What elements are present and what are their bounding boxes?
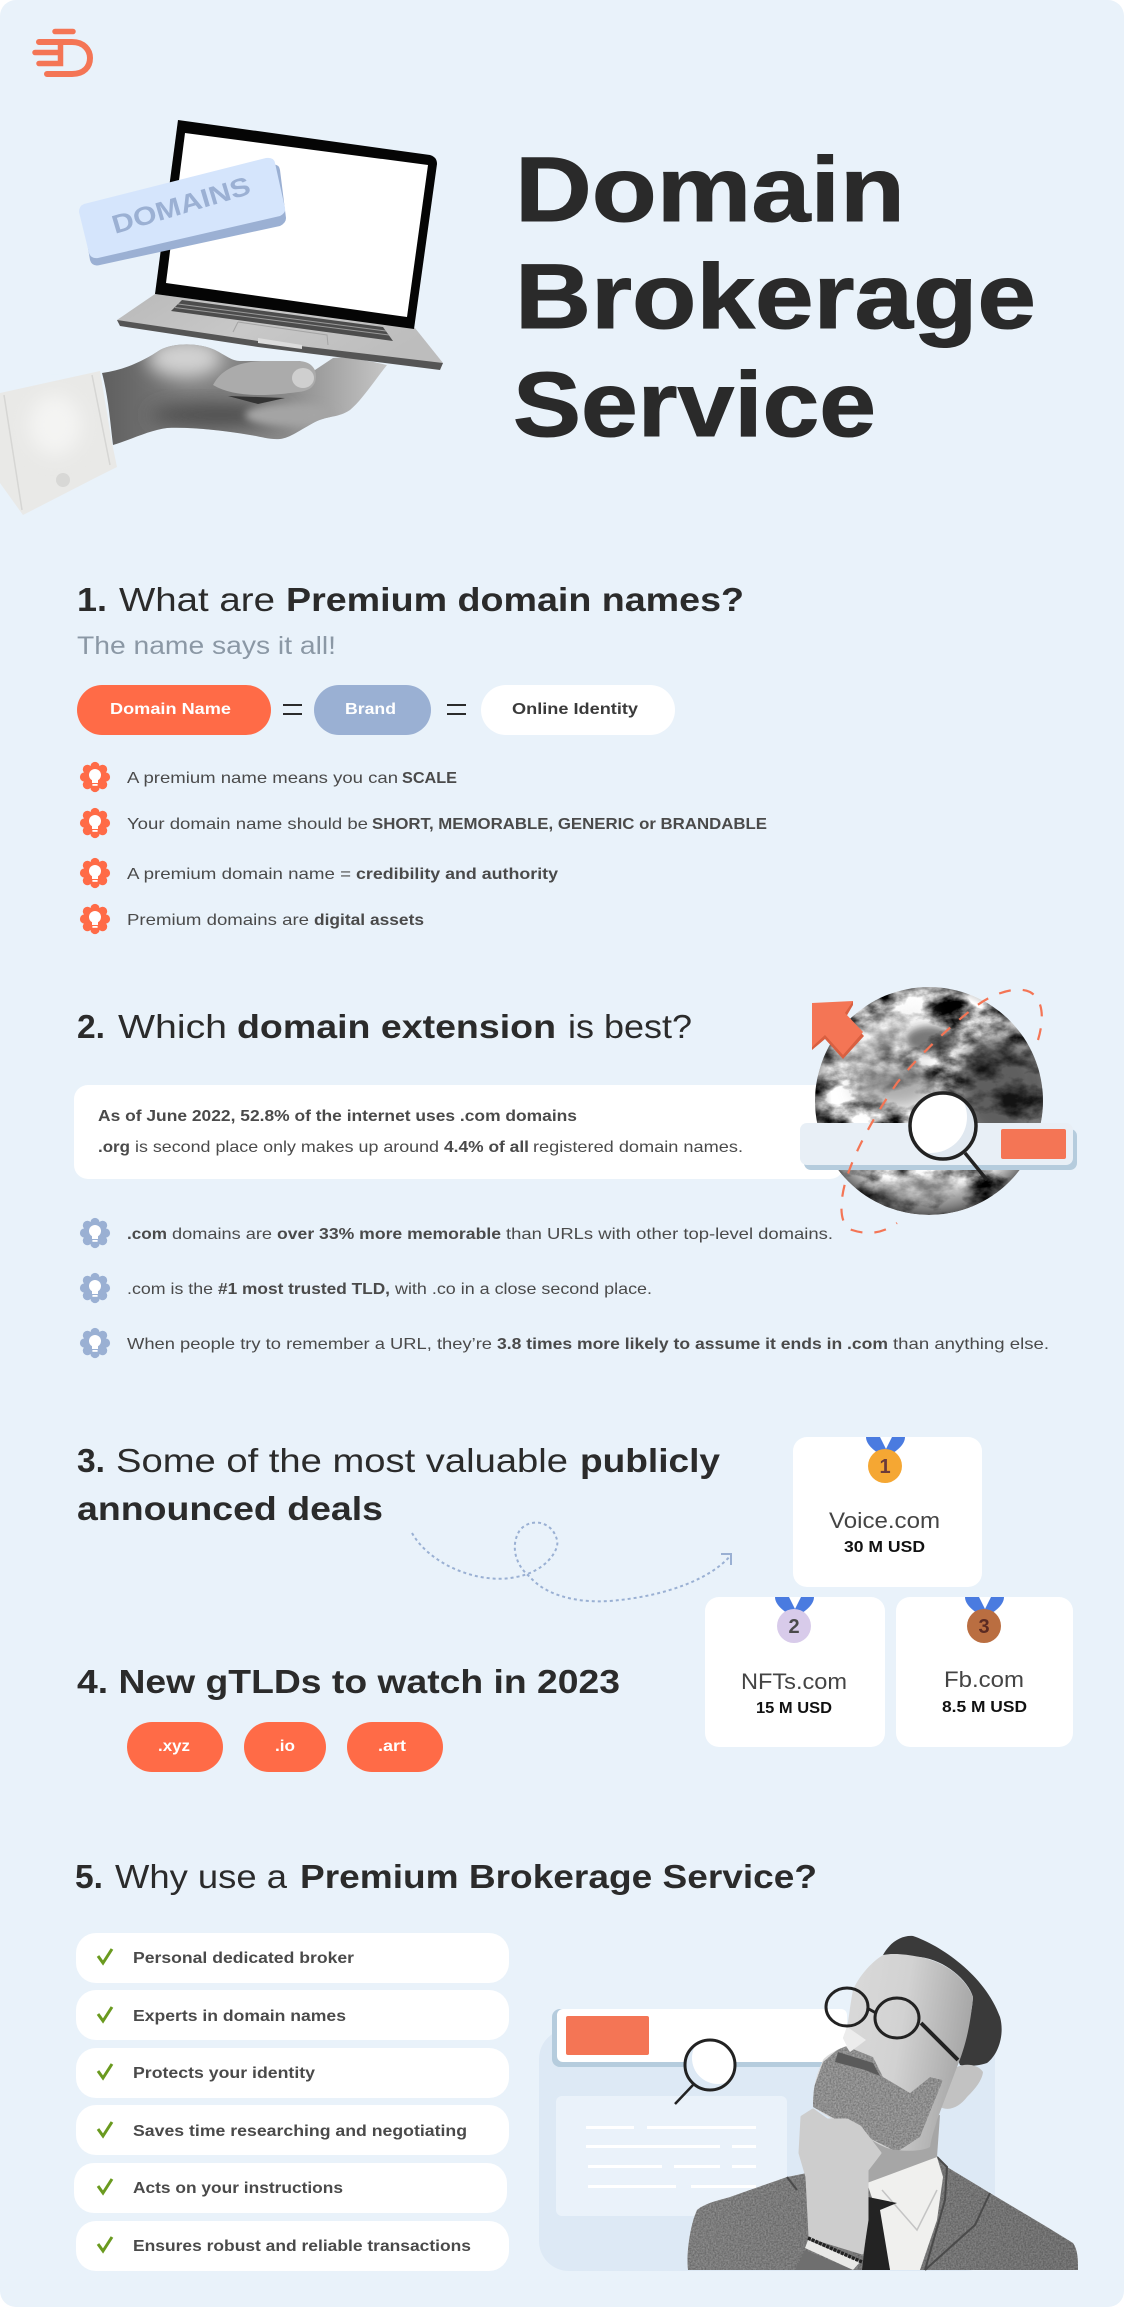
search bar bbox=[552, 2009, 842, 2067]
bullet: trusted: .com is the bbox=[127, 1281, 213, 1298]
heading 3: 3. bbox=[77, 1442, 105, 1479]
bracelet bbox=[808, 2238, 862, 2262]
bullet: scale bbox=[80, 762, 457, 792]
pill: brand bbox=[314, 685, 431, 735]
deal card: fb.com: 8.5 M USD bbox=[942, 1699, 1027, 1716]
pill: online identity bbox=[481, 685, 675, 735]
globe bbox=[815, 987, 1045, 1215]
thumb bbox=[213, 361, 316, 395]
dotted arrow bbox=[412, 1523, 731, 1601]
heading 2: is best? bbox=[568, 1008, 692, 1045]
silver medal: 2 bbox=[788, 1616, 800, 1638]
bullet: trusted: with .co in a close second place. bbox=[394, 1281, 652, 1298]
trackpad bbox=[233, 322, 328, 345]
heading 2: domain extension bbox=[237, 1008, 556, 1045]
row: transactions: Ensures robust and reliable transactions bbox=[133, 2238, 471, 2255]
key label: DOMAINS bbox=[108, 170, 254, 240]
pill: io: .io bbox=[275, 1738, 295, 1755]
statistics card: registered domain names. bbox=[533, 1139, 743, 1156]
heading 5: 5. bbox=[75, 1858, 103, 1895]
row: instructions bbox=[74, 2163, 507, 2213]
bullet: memorable: domains are bbox=[172, 1226, 272, 1243]
title: Domain bbox=[515, 139, 905, 241]
section 4: new gTLDs bbox=[77, 1663, 620, 1772]
heading 2 bbox=[77, 1008, 692, 1045]
pill: io bbox=[244, 1722, 326, 1772]
magnifier bbox=[908, 1091, 988, 1181]
jacket bbox=[687, 2157, 1078, 2270]
bullet: digital assets bbox=[80, 904, 424, 934]
statistics card: As of June 2022, 52.8% of the internet uses .com domains bbox=[98, 1108, 577, 1125]
bullet: credibility bbox=[80, 858, 558, 888]
bullet: trusted: #1 most trusted TLD, bbox=[218, 1281, 390, 1298]
bullet: scale: SCALE bbox=[402, 770, 457, 787]
heading 3 bbox=[77, 1442, 721, 1527]
magnifier bbox=[674, 2038, 736, 2105]
statistics card bbox=[74, 1085, 844, 1179]
section 3: valuable deals bbox=[77, 1437, 1073, 1747]
heading 5: Why use a bbox=[115, 1858, 288, 1895]
subheading: The name says it all! bbox=[77, 632, 336, 660]
row: personal broker: Personal dedicated broker bbox=[133, 1950, 354, 1967]
row: transactions bbox=[76, 2221, 509, 2271]
bullet: memorable: over 33% more memorable bbox=[277, 1226, 501, 1243]
man bbox=[687, 1936, 1078, 2270]
keyboard bbox=[171, 300, 393, 341]
pill: xyz bbox=[127, 1722, 223, 1772]
silver medal bbox=[775, 1597, 814, 1643]
bullet: short memorable: Your domain name should be bbox=[127, 816, 368, 833]
search bar bbox=[804, 1129, 1077, 1170]
heading 1: Premium domain names? bbox=[286, 581, 744, 618]
beard bbox=[813, 2024, 943, 2152]
row: saves time: Saves time researching and negotiating bbox=[133, 2123, 467, 2140]
bullet: scale: A premium name means you can bbox=[127, 770, 398, 787]
bullet: digital assets: digital assets bbox=[314, 912, 424, 929]
statistics card: is second place only makes up around bbox=[135, 1139, 439, 1156]
bullet: memorable: than URLs with other top-level domains. bbox=[506, 1226, 833, 1243]
gold medal: 1 bbox=[879, 1456, 891, 1478]
illustration: thinking man with search bbox=[539, 1936, 1078, 2271]
deal card: fb.com bbox=[896, 1597, 1073, 1747]
ear bbox=[940, 2065, 983, 2109]
heading 3: Some of the most valuable bbox=[116, 1442, 568, 1479]
bullet: credibility: A premium domain name = bbox=[127, 866, 351, 883]
bullet: trusted bbox=[80, 1273, 652, 1303]
deal card: fb.com: Fb.com bbox=[944, 1667, 1024, 1692]
hair bbox=[883, 1936, 1002, 2066]
deal card: voice.com: 30 M USD bbox=[844, 1539, 925, 1556]
section 1: premium domain names bbox=[77, 581, 767, 934]
statistics card: .org bbox=[98, 1139, 130, 1156]
bullet: 3.8 times: 3.8 times more likely to assume it ends in .com bbox=[497, 1336, 888, 1353]
statistics card: 4.4% of all bbox=[444, 1139, 529, 1156]
deal card: voice.com: Voice.com bbox=[829, 1508, 940, 1533]
heading 3: announced deals bbox=[77, 1490, 383, 1527]
bullet: 3.8 times: than anything else. bbox=[893, 1336, 1049, 1353]
pill: domain name: Domain Name bbox=[110, 701, 231, 718]
shirt bbox=[867, 2157, 943, 2270]
row: experts: Experts in domain names bbox=[133, 2008, 346, 2025]
bullet: 3.8 times bbox=[80, 1328, 1049, 1358]
deal card: nfts.com bbox=[705, 1597, 885, 1747]
bullet: memorable: .com bbox=[127, 1226, 167, 1243]
heading 3: publicly bbox=[580, 1442, 721, 1479]
bullet: credibility: credibility and authority bbox=[356, 866, 558, 883]
bullet: short memorable: SHORT, MEMORABLE, GENERIC or BRANDABLE bbox=[372, 816, 767, 833]
heading 5: Premium Brokerage Service? bbox=[300, 1858, 817, 1895]
section 2: domain extension bbox=[74, 987, 1077, 1358]
pill: brand: Brand bbox=[345, 701, 396, 718]
title: Brokerage bbox=[515, 246, 1036, 348]
shirt sleeve bbox=[0, 371, 117, 515]
deal card: voice.com bbox=[793, 1437, 982, 1587]
heading 1: What are bbox=[119, 581, 275, 618]
row: instructions: Acts on your instructions bbox=[133, 2180, 343, 2197]
gold medal bbox=[866, 1437, 905, 1483]
glasses bbox=[826, 1988, 958, 2060]
heading 2: 2. bbox=[77, 1008, 105, 1045]
pill: online identity: Online Identity bbox=[512, 701, 638, 718]
shirt cuff bbox=[805, 2240, 860, 2270]
hand bbox=[102, 338, 387, 445]
laptop base bbox=[117, 294, 443, 370]
row: personal broker bbox=[76, 1933, 509, 1983]
bullet: memorable bbox=[80, 1218, 833, 1248]
bullet: short memorable bbox=[80, 808, 767, 838]
pill: art: .art bbox=[378, 1738, 407, 1755]
pill: art bbox=[347, 1722, 443, 1772]
row: experts bbox=[76, 1990, 509, 2040]
heading 1: 1. bbox=[77, 581, 107, 618]
orange arrow bbox=[812, 1001, 864, 1059]
heading 1 bbox=[77, 581, 744, 618]
heading 2: Which bbox=[118, 1008, 227, 1045]
heading 4: 4. New gTLDs to watch in 2023 bbox=[77, 1663, 620, 1700]
sleeve bbox=[795, 2250, 853, 2270]
equation pills bbox=[77, 685, 675, 735]
neck bbox=[867, 2115, 940, 2185]
laptop screen frame bbox=[155, 120, 437, 329]
document panel bbox=[556, 2096, 787, 2216]
bronze medal: 3 bbox=[978, 1616, 990, 1638]
laptop screen bbox=[166, 133, 428, 317]
logo bbox=[35, 32, 90, 74]
dashed orbit bbox=[841, 990, 1042, 1233]
pill: xyz: .xyz bbox=[158, 1738, 190, 1755]
hand on chin bbox=[800, 2110, 880, 2253]
title: Service bbox=[513, 354, 876, 456]
illustration: hand holding laptop bbox=[0, 120, 443, 515]
title bbox=[513, 139, 1036, 456]
heading 5 bbox=[75, 1858, 817, 1895]
pill: domain name bbox=[77, 685, 271, 735]
deal card: nfts.com: NFTs.com bbox=[741, 1669, 847, 1694]
bullet: 3.8 times: When people try to remember a URL, they’re bbox=[127, 1336, 492, 1353]
row: saves time bbox=[76, 2105, 509, 2155]
row: identity bbox=[76, 2048, 509, 2098]
domains key bbox=[79, 158, 286, 265]
deal card: nfts.com: 15 M USD bbox=[756, 1700, 832, 1717]
row: identity: Protects your identity bbox=[133, 2065, 315, 2082]
backdrop panel bbox=[539, 2029, 995, 2271]
illustration: globe and search bbox=[800, 987, 1077, 1233]
lapels bbox=[787, 2157, 990, 2270]
bronze medal bbox=[965, 1597, 1004, 1643]
face bbox=[813, 1954, 973, 2151]
tie bbox=[862, 2197, 897, 2270]
section 5: why brokerage bbox=[74, 1858, 1078, 2271]
bullet: digital assets: Premium domains are bbox=[127, 912, 309, 929]
